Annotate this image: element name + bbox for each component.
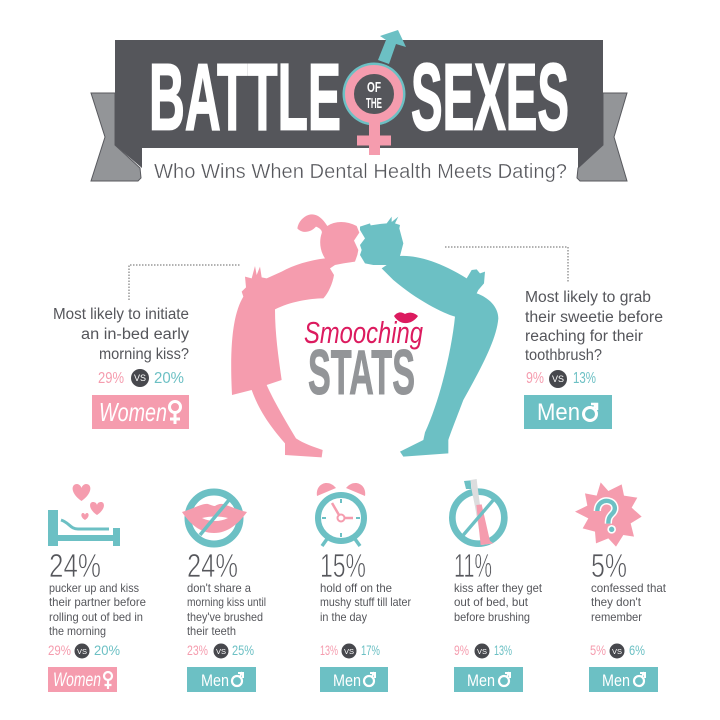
man silhouette	[360, 217, 498, 457]
percent: 24%	[49, 547, 101, 584]
panel: don't remember 5%	[575, 482, 667, 692]
question text: their sweetie before	[525, 309, 663, 326]
winner badge women: Women	[53, 670, 101, 691]
woman silhouette	[231, 214, 359, 457]
comparison stats: VS	[612, 647, 622, 656]
comparison stats: 23%	[187, 642, 208, 658]
comparison stats	[48, 642, 120, 658]
description: confessed that	[591, 581, 667, 595]
comparison stats: 13%	[573, 370, 596, 387]
description: they've brushed	[187, 610, 263, 624]
question text: an in-bed early	[81, 326, 189, 343]
question text: toothbrush?	[525, 347, 602, 364]
comparison stats: 9%	[526, 370, 544, 387]
comparison stats	[187, 642, 254, 658]
description: mushy stuff till later	[320, 595, 411, 609]
icon: alarm clock	[317, 483, 365, 546]
icon: question burst	[575, 482, 642, 547]
ribbon tail right	[577, 93, 627, 181]
description: morning kiss until	[187, 595, 266, 609]
description: pucker up and kiss	[49, 581, 139, 595]
panel: pucker up 24%	[48, 484, 146, 692]
winner badge men	[589, 667, 658, 692]
question text	[53, 306, 189, 363]
winner badge men: Men	[602, 671, 630, 690]
description: before brushing	[454, 610, 530, 624]
subtitle: Who Wins When Dental Health Meets Dating?	[154, 161, 567, 183]
question text: Most likely to grab	[525, 289, 651, 306]
comparison stats: VS	[344, 647, 354, 656]
icon: gender symbol: THE	[366, 95, 382, 112]
percent: 11%	[454, 547, 492, 584]
comparison stats: VS	[216, 647, 226, 656]
comparison stats: VS	[77, 647, 87, 656]
comparison stats: 17%	[361, 642, 380, 658]
panel: no morning kiss 24%	[182, 492, 266, 692]
ribbon tail left	[91, 93, 141, 181]
comparison stats	[320, 642, 380, 658]
comparison stats: 13%	[494, 642, 512, 658]
percent: 24%	[187, 547, 238, 584]
comparison stats: 13%	[320, 642, 338, 658]
winner badge men: Men	[467, 671, 495, 690]
comparison stats	[454, 642, 512, 658]
percent: 15%	[320, 547, 366, 584]
description: their partner before	[49, 595, 146, 609]
icon: bed with hearts	[48, 484, 120, 546]
callout: women initiate	[53, 306, 189, 429]
kissing couple silhouette	[231, 214, 498, 457]
description: out of bed, but	[454, 595, 529, 609]
description: kiss after they get	[454, 581, 543, 595]
percent: 5%	[591, 547, 627, 584]
comparison stats: 20%	[94, 642, 120, 658]
panel: hold off 15%	[317, 483, 411, 692]
icon: crossed toothbrush	[452, 479, 504, 545]
stats word: STATS	[308, 338, 415, 408]
icon: crossed lips	[182, 492, 247, 544]
comparison stats: 9%	[454, 642, 469, 658]
description: remember	[591, 610, 642, 624]
description: in the day	[320, 610, 367, 624]
comparison stats: VS	[552, 374, 564, 384]
icon: gender symbol: OF	[367, 79, 381, 96]
winner badge men	[454, 667, 523, 692]
comparison stats: 5%	[590, 642, 606, 658]
comparison stats	[590, 642, 645, 658]
smooching script: Smooching	[304, 315, 423, 350]
question text	[525, 289, 663, 364]
comparison stats: 29%	[98, 370, 124, 387]
dotted connector left	[129, 265, 240, 300]
icon: lips	[394, 312, 418, 323]
smooching stats heading	[304, 312, 423, 408]
description: the morning	[49, 624, 106, 638]
winner badge men: Men	[201, 671, 229, 690]
callout: men grab	[524, 289, 663, 429]
description: hold off on the	[320, 581, 392, 595]
description	[454, 581, 543, 624]
icon: gender symbol	[342, 30, 406, 155]
description	[187, 581, 266, 638]
description: don't share a	[187, 581, 251, 595]
question text: reaching for their	[525, 328, 643, 345]
comparison stats: VS	[477, 647, 487, 656]
comparison stats: 25%	[232, 642, 254, 658]
banner body	[115, 40, 603, 168]
title banner	[91, 30, 627, 183]
winner badge men: Men	[537, 399, 580, 426]
title word sexes: SEXES	[411, 44, 569, 150]
comparison stats: 29%	[48, 642, 71, 658]
panel: after bed 11%	[452, 479, 543, 692]
description	[591, 581, 667, 624]
description: they don't	[591, 595, 642, 609]
winner badge women: Women	[99, 397, 167, 427]
dotted connector right	[445, 247, 568, 283]
comparison stats: VS	[134, 373, 146, 383]
comparison stats: 20%	[154, 370, 184, 387]
description: their teeth	[187, 624, 236, 638]
winner badge men: Men	[333, 671, 361, 690]
description	[320, 581, 411, 624]
comparison stats	[526, 370, 596, 388]
winner badge men	[320, 667, 388, 692]
description: rolling out of bed in	[49, 610, 143, 624]
description	[49, 581, 146, 638]
question text: Most likely to initiate	[53, 306, 189, 323]
question text: morning kiss?	[99, 346, 189, 363]
title word battle: BATTLE	[149, 44, 341, 150]
comparison stats: 6%	[629, 642, 645, 658]
winner badge men	[187, 667, 256, 692]
comparison stats	[98, 369, 184, 387]
